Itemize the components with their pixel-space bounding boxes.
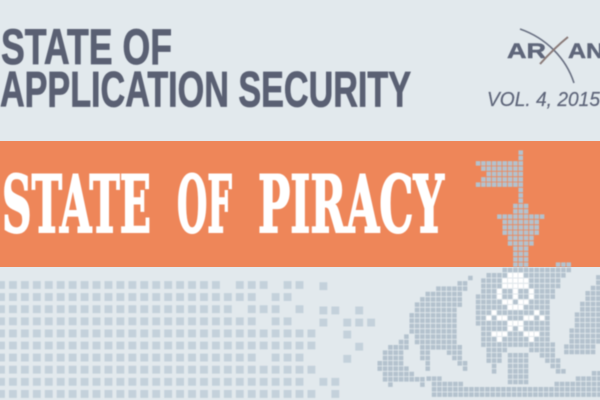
banner: orange band: [0, 141, 600, 267]
banner title: state of piracy: PIRACY: [258, 158, 445, 251]
heading: state of application security: APPLICATION SECURITY: [0, 60, 411, 118]
ship: hull: [426, 373, 600, 395]
pixel ship: [377, 153, 600, 395]
banner title: state of piracy: [2, 158, 445, 251]
icon: skull and crossbones: [486, 275, 545, 339]
dot grid: world map field: [0, 285, 379, 394]
ship: right sail: [564, 277, 600, 352]
banner title: state of piracy: STATE: [2, 158, 151, 251]
heading: state of application security: [0, 18, 411, 118]
heading: state of application security: STATE OF: [1, 18, 172, 75]
ship: left sails: [377, 278, 473, 385]
logo: Arxan: AN: [568, 39, 600, 63]
logo: Arxan: [507, 29, 600, 83]
banner title: state of piracy: OF: [177, 158, 232, 251]
logo: Arxan: AR: [507, 39, 547, 63]
ship: flag, mast and hull centre: [476, 153, 572, 382]
